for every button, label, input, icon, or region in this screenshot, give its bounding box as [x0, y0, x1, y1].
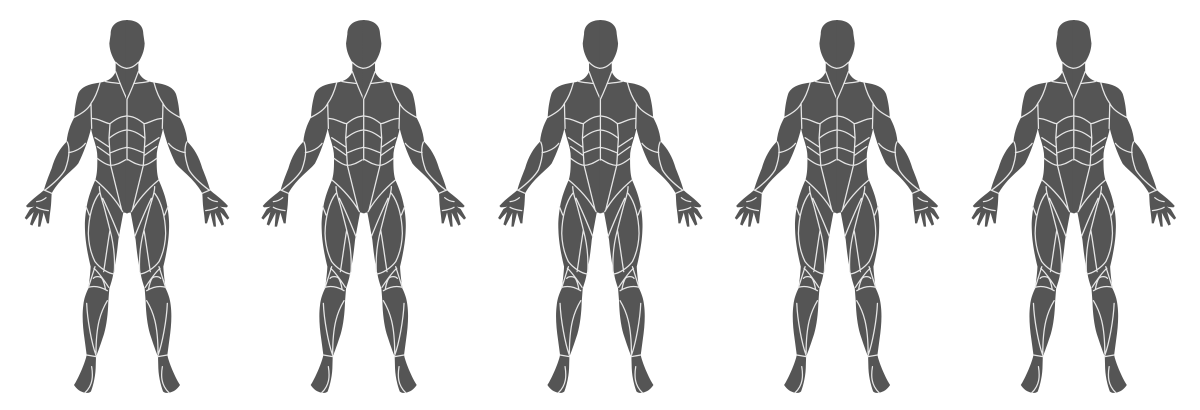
muscle figure 2	[261, 20, 466, 393]
muscle figure 5	[971, 20, 1176, 393]
muscle figure 1	[25, 20, 229, 393]
muscle figure 4	[735, 20, 939, 393]
muscle figure 3	[498, 20, 703, 393]
